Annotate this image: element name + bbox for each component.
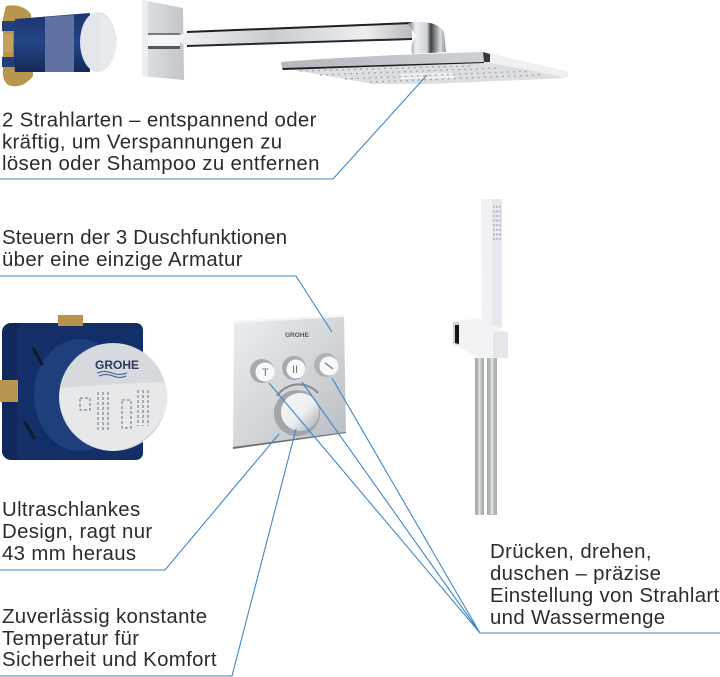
product: wall plate and shower arm	[142, 0, 412, 80]
push button 1: T	[262, 367, 269, 379]
callout text: ultraschlankes Design: Ultraschlankes	[2, 499, 140, 521]
leader line: single fitting	[0, 276, 332, 332]
callout text: ultraschlankes Design: 43 mm heraus	[2, 543, 136, 565]
leader lines: push buttons	[269, 378, 720, 633]
callout text: konstante Temperatur: Sicherheit und Komfort	[2, 649, 217, 671]
push button 3	[314, 353, 338, 377]
product: thermostat control plate: GROHE	[285, 332, 310, 339]
callout text: Duschfunktionen: über eine einzige Armatur	[2, 249, 243, 271]
product: rain shower head	[281, 52, 568, 84]
callout text: konstante Temperatur: Zuverlässig konstante	[2, 606, 207, 628]
callout text: ultraschlankes Design: Design, ragt nur	[2, 521, 153, 543]
product: hand shower with holder and hose	[453, 199, 508, 515]
callout text: Drücken, drehen, duschen: duschen – präzise	[490, 563, 661, 585]
leader line: slim design	[0, 434, 279, 570]
leader line: shower head	[0, 75, 427, 179]
circular cover with logo	[59, 343, 168, 451]
push button 2: II	[292, 364, 298, 376]
circular cover with logo: GROHE	[95, 358, 139, 372]
callout text: Strahlarten: lösen oder Shampoo zu entfernen	[2, 153, 320, 175]
callout text: Drücken, drehen, duschen: und Wassermenge	[490, 607, 665, 629]
thermostat knob	[274, 384, 320, 436]
callout text: Duschfunktionen: Steuern der 3 Duschfunktionen	[2, 227, 287, 249]
callout text: Drücken, drehen, duschen: Einstellung von Strahlart	[490, 585, 720, 607]
callout text: konstante Temperatur: Temperatur für	[2, 628, 139, 650]
callout text: Strahlarten: 2 Strahlarten – entspannend oder	[2, 110, 317, 132]
product: thermostat control plate	[233, 315, 346, 449]
leader line: temperature	[0, 429, 296, 676]
product: shower arm elbow	[408, 22, 446, 54]
callout text: Strahlarten: kräftig, um Verspannungen zu	[2, 132, 282, 154]
product: small concealed valve body	[2, 5, 117, 86]
callout text: Drücken, drehen, duschen: Drücken, drehen,	[490, 541, 652, 563]
product: large concealed valve box	[0, 315, 168, 460]
